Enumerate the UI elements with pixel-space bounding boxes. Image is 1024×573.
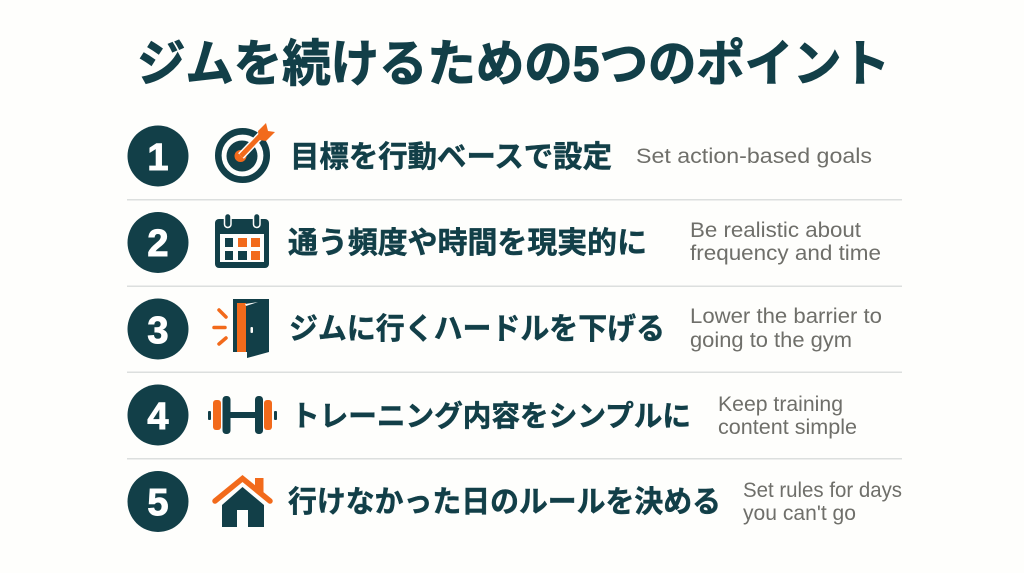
icon: dumbbell [208, 396, 277, 434]
row 3: lower the barrier [128, 298, 882, 360]
english caption 4 [718, 393, 857, 439]
row 1: action-based goals [128, 123, 872, 186]
number badge 1: 1 [147, 137, 169, 179]
english caption 5: Set rules for days [743, 479, 902, 502]
english caption 2 [690, 219, 881, 265]
number badge 1 [128, 126, 188, 186]
number badge 5 [128, 471, 188, 532]
icon: open door [214, 299, 269, 358]
heading 3: ジムに行くハードルを下げる [289, 313, 665, 346]
english caption 3 [690, 305, 882, 352]
english caption 4: Keep training [718, 393, 843, 416]
row 5: rules for missed days [128, 471, 902, 532]
heading 4: トレーニング内容をシンプルに [291, 400, 691, 433]
title: ジムを続けるための5つのポイント [137, 36, 890, 92]
heading 1: 目標を行動ベースで設定 [290, 141, 612, 174]
row dividers [127, 199, 902, 460]
number badge 2: 2 [147, 223, 169, 265]
icon: target with arrow [218, 123, 275, 180]
icon: house [215, 478, 270, 527]
number badge 2 [128, 212, 188, 273]
number badge 4: 4 [147, 396, 169, 438]
number badge 5: 5 [147, 482, 169, 524]
english caption 5 [743, 479, 902, 525]
icon: calendar [215, 214, 269, 268]
english caption 1: Set action-based goals [636, 145, 872, 168]
english caption 4: content simple [718, 416, 857, 439]
english caption 2: Be realistic about [690, 219, 861, 242]
number badge 3 [128, 298, 188, 360]
english caption 2: frequency and time [690, 242, 881, 265]
number badge 3: 3 [147, 310, 169, 352]
english caption 3: Lower the barrier to [690, 305, 882, 328]
heading 5: 行けなかった日のルールを決める [288, 486, 721, 519]
number badge 4 [128, 384, 188, 446]
row 4: simple training [128, 384, 857, 446]
english caption 3: going to the gym [690, 329, 852, 352]
row 2: frequency and time [128, 212, 881, 273]
heading 2: 通う頻度や時間を現実的に [288, 227, 647, 260]
english caption 5: you can't go [743, 502, 856, 525]
